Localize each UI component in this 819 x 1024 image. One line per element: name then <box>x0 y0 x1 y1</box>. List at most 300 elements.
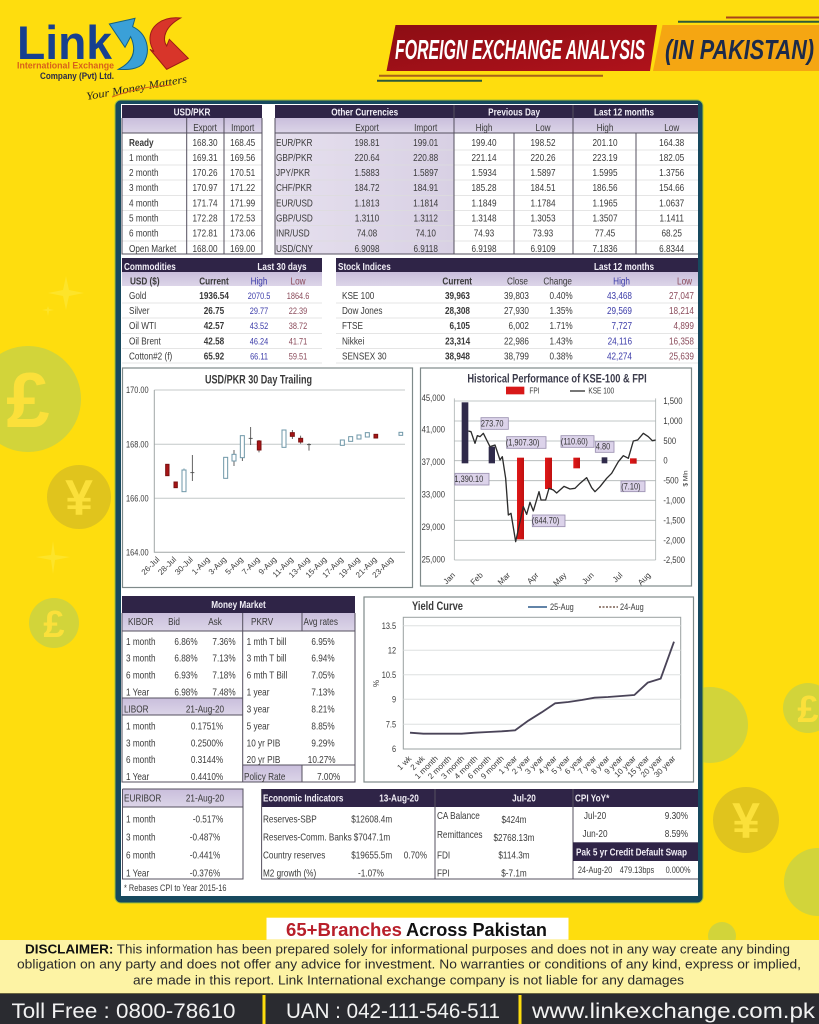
chart: yield curve: 12 <box>388 646 396 656</box>
table: other currencies: 1.1784 <box>530 198 556 209</box>
month axis labels: Feb <box>469 570 485 587</box>
disclaimer: DISCLAIMER: This information has been prepared solely for informational purposes and does not in any way create any binding <box>25 942 790 956</box>
table: USD/PKR: 173.06 <box>230 228 255 239</box>
chart legend <box>528 602 644 612</box>
table: other currencies: 6.9198 <box>471 243 497 254</box>
date axis labels: 19-Aug <box>337 555 362 580</box>
decorative currency coins: £ <box>797 689 819 731</box>
yield lines <box>410 642 674 734</box>
table: commodities: Low <box>291 276 306 287</box>
table: economic indicators: $12608.4m <box>351 814 392 825</box>
date axis labels: 30-Jul <box>173 555 195 577</box>
table: money market: Avg rates <box>304 616 338 627</box>
table: CPI and credit default swap: Jun-20 <box>582 828 608 839</box>
table: stock indices: 18,214 <box>669 305 694 316</box>
table: money market: 7.13% <box>311 687 335 698</box>
table: money market: 6.95% <box>311 636 335 647</box>
table: stock indices: 43,468 <box>607 290 632 301</box>
right axis: -1,000 <box>663 495 685 506</box>
table: USD/PKR: 172.81 <box>192 228 218 239</box>
title banner <box>377 18 819 81</box>
table: other currencies: Previous Day <box>488 107 541 118</box>
table: USD/PKR: 171.22 <box>230 182 255 193</box>
logo blue arrow <box>109 18 147 70</box>
table: USD/PKR: 169.56 <box>230 152 255 163</box>
table: economic indicators: $114.3m <box>498 850 530 861</box>
candlesticks <box>166 427 403 492</box>
date axis labels: 3-Aug <box>207 555 228 577</box>
table: other currencies: 6.9098 <box>354 243 380 254</box>
table: other currencies: 220.64 <box>354 152 380 163</box>
gridlines <box>454 398 656 560</box>
table: EURIBOR: -0.517% <box>193 814 223 825</box>
table: CPI and credit default swap: 9.30% <box>665 810 688 821</box>
date axis labels: 5-Aug <box>223 555 245 577</box>
table: USD/PKR: 169.31 <box>192 152 218 163</box>
table: other currencies: 1.3756 <box>659 167 684 178</box>
month axis labels: Aug <box>636 571 652 587</box>
FPI data callouts <box>455 418 645 527</box>
table: other currencies: 182.05 <box>659 152 684 163</box>
right axis: -2,000 <box>663 535 685 546</box>
decorative currency coins: £ <box>6 356 50 444</box>
table: other currencies: 1.1813 <box>354 198 380 209</box>
tenor axis labels: 6 year <box>563 754 585 776</box>
tenor axis labels: 3 year <box>523 754 546 776</box>
table: USD/PKR: 171.74 <box>192 198 218 209</box>
table: economic indicators: Remittances <box>437 829 483 840</box>
table: EURIBOR: -0.441% <box>190 850 220 861</box>
table: money market: 6 month <box>126 754 156 765</box>
chart: yield curve: 6 <box>392 744 396 754</box>
table: commodities: High <box>251 276 267 287</box>
table: other currencies: 1.1849 <box>471 198 497 209</box>
disclaimer: obligation on any party and does not offer any advice for investment. No warranties or conditions of any kind, express or implied, <box>17 956 801 972</box>
decorative currency coins: £ <box>43 604 65 646</box>
table: money market: 9.29% <box>311 738 335 749</box>
table: economic indicators: $424m <box>501 814 527 825</box>
UAN: UAN : 042-111-546-511 <box>286 1000 500 1023</box>
date axis labels: 28-Jul <box>156 555 178 577</box>
table: economic indicators: $19655.5m <box>351 850 392 861</box>
table: CPI and credit default swap: 479.13bps <box>620 865 654 875</box>
table: commodities: 2070.5 <box>248 291 271 301</box>
month axis labels <box>442 570 652 588</box>
table: other currencies: GBP/PKR <box>276 152 313 163</box>
table: money market: 10 yr PIB <box>247 738 280 749</box>
website: www.linkexchange.com.pk <box>531 1000 816 1023</box>
table: stock indices: 39,963 <box>445 290 470 301</box>
tenor axis labels: 1 month <box>413 754 440 781</box>
chart: USD/PKR candlesticks <box>122 368 412 588</box>
table: other currencies: 220.26 <box>530 152 556 163</box>
decorative currency coins: ¥ <box>65 470 93 526</box>
table: stock indices: 27,930 <box>504 305 529 316</box>
table: economic indicators: $-7.1m <box>501 868 527 879</box>
table: stock indices: 24,116 <box>608 336 632 347</box>
table: stock indices: 28,308 <box>445 305 470 316</box>
table: other currencies: Last 12 months <box>594 107 654 118</box>
right axis: -1,500 <box>663 515 685 526</box>
table: other currencies: 198.52 <box>530 137 556 148</box>
table: USD/PKR: 4 month <box>129 198 159 209</box>
table: stock indices: 7,727 <box>612 320 632 331</box>
table: other currencies: 1.3110 <box>355 213 379 224</box>
decorative currency coins: ¥ <box>732 793 760 849</box>
tenor axis labels: 5 year <box>550 754 572 776</box>
table: money market: 7.13% <box>212 653 236 664</box>
table: CPI and credit default swap: Jul-20 <box>584 810 606 821</box>
disclaimer: are made in this report. Link International exchange company is not liable for any damages <box>133 972 685 988</box>
table: commodities: Current <box>199 276 229 287</box>
table: USD/PKR: 170.26 <box>192 167 218 178</box>
right axis: -2,500 <box>663 554 685 565</box>
table: money market: 0.1751% <box>191 721 223 732</box>
table: other currencies: 201.10 <box>592 137 618 148</box>
chart legend <box>506 386 614 396</box>
chart: USD/PKR candlesticks: 170.00 <box>126 385 149 395</box>
table: stock indices: KSE 100 <box>342 290 374 301</box>
table: stock indices: 29,569 <box>607 305 632 316</box>
table: money market <box>122 596 355 782</box>
table: USD/PKR: 1 month <box>129 152 159 163</box>
table: other currencies: CHF/PKR <box>276 182 312 193</box>
table: CPI and credit default swap: 0.000% <box>666 865 691 875</box>
table: other currencies: High <box>597 122 613 133</box>
branches banner: 65+Branches <box>286 920 402 940</box>
table: money market: 7.36% <box>212 636 236 647</box>
table: money market: 1 year <box>247 687 269 698</box>
table: stock indices: FTSE <box>342 320 363 331</box>
table: economic indicators: $2768.13m <box>494 832 534 843</box>
table: other currencies: 74.08 <box>357 228 377 239</box>
table: commodities: Silver <box>129 305 149 316</box>
table: commodities: Oil Brent <box>129 336 161 347</box>
table: other currencies: 184.91 <box>413 182 438 193</box>
table: CPI and credit default swap: 8.59% <box>665 828 688 839</box>
table: other currencies: Import <box>414 122 438 133</box>
date axis labels: 17-Aug <box>321 555 345 580</box>
table: commodities: 46.24 <box>250 337 269 347</box>
tenor axis labels: 4 month <box>453 754 479 781</box>
table: other currencies: 74.10 <box>415 228 436 239</box>
table: commodities: 59.51 <box>289 352 308 362</box>
table: other currencies: 186.56 <box>592 182 618 193</box>
tenor axis labels: 2 month <box>426 754 453 781</box>
table: EURIBOR: 3 month <box>126 832 156 843</box>
table: USD/PKR: Import <box>231 122 255 133</box>
table: USD/PKR: 2 month <box>129 167 159 178</box>
main report panel <box>115 100 703 903</box>
table: stock indices: 4,899 <box>674 320 694 331</box>
table: other currencies <box>275 105 698 254</box>
table: money market: 3 mth T bill <box>247 653 286 664</box>
chart legend: 25-Aug <box>550 602 574 612</box>
chart title: Historical Performance of KSE-100 & FPI <box>467 372 647 385</box>
table: EURIBOR: 21-Aug-20 <box>186 793 224 804</box>
table: stock indices: Low <box>677 276 692 287</box>
table: stock indices: 27,047 <box>669 290 694 301</box>
table: money market: 7.18% <box>212 670 236 681</box>
table: stock indices: Current <box>442 276 472 287</box>
table: commodities: 29.77 <box>250 306 269 316</box>
table: commodities <box>122 258 322 363</box>
table: commodities: 22.39 <box>289 306 308 316</box>
table: stock indices: SENSEX 30 <box>342 351 387 362</box>
table: money market: Bid <box>168 616 180 627</box>
table: commodities: 26.75 <box>204 305 224 316</box>
table: other currencies: 73.93 <box>533 228 553 239</box>
table: USD/PKR: 170.51 <box>230 167 255 178</box>
table: commodities: Oil WTI <box>129 320 156 331</box>
table: money market: 10.27% <box>308 754 336 765</box>
table: other currencies: 198.81 <box>354 137 380 148</box>
table: other currencies: EUR/PKR <box>276 137 313 148</box>
right axis: 0 <box>663 455 668 466</box>
table: stock indices: Last 12 months <box>594 261 654 272</box>
table: USD/PKR: USD/PKR <box>174 107 211 118</box>
table: USD/PKR: 168.30 <box>192 137 218 148</box>
table: other currencies: 154.66 <box>659 182 684 193</box>
chart legend: KSE 100 <box>588 386 614 396</box>
table: commodities: Last 30 days <box>257 261 307 272</box>
table: money market: PKRV <box>251 616 274 627</box>
table: USD/PKR: 168.00 <box>192 243 218 254</box>
table: other currencies: 199.40 <box>471 137 497 148</box>
tenor axis labels: 8 year <box>589 754 612 776</box>
table: money market: 6.86% <box>174 636 198 647</box>
table: EURIBOR: -0.376% <box>190 868 220 879</box>
chart: USD/PKR candlesticks: 164.00 <box>126 548 149 558</box>
FPI bars <box>462 402 637 539</box>
company type: Company (Pvt) Ltd. <box>40 71 114 82</box>
table: USD/PKR: 172.28 <box>192 213 218 224</box>
table: stock indices: 6,105 <box>450 320 470 331</box>
table: commodities: Gold <box>129 290 146 301</box>
table: commodities: 41.71 <box>289 337 308 347</box>
chart legend: 24-Aug <box>620 602 644 612</box>
table: EURIBOR <box>122 789 243 879</box>
table: stock indices: 6,002 <box>509 320 529 331</box>
company name: International Exchange <box>17 60 114 72</box>
tenor axis labels: 3 month <box>439 754 466 781</box>
logo wordmark: Link <box>17 16 113 69</box>
table: commodities: 66.11 <box>250 352 268 362</box>
table: commodities: USD ($) <box>130 276 160 287</box>
FPI data callouts: (1,907.30) <box>506 438 540 448</box>
table: money market: 6 mth T Bill <box>247 670 287 681</box>
table: stock indices: 1.43% <box>549 336 573 347</box>
date axis labels: 1-Aug <box>190 555 212 577</box>
table: money market: 21-Aug-20 <box>186 704 224 715</box>
left axis: 33,000 <box>422 489 445 500</box>
table: CPI and credit default swap: Pak 5 yr Credit Default Swap <box>576 847 687 858</box>
tagline: Your Money Matters <box>85 73 188 103</box>
table: money market: 5 year <box>247 721 269 732</box>
decorative currency coins <box>0 276 819 950</box>
table: money market: 8.85% <box>311 721 335 732</box>
table: other currencies: 1.3053 <box>530 213 556 224</box>
right axis: -500 <box>663 475 679 486</box>
table: EURIBOR: 1 Year <box>126 868 149 879</box>
table: other currencies: 1.5995 <box>592 167 618 178</box>
chart: yield curve: % <box>372 680 381 687</box>
table: other currencies: 1.1965 <box>592 198 618 209</box>
table: stock indices: High <box>613 276 630 287</box>
table: economic indicators: Reserves-SBP <box>263 814 317 825</box>
table: money market: 6.88% <box>174 653 198 664</box>
table: other currencies: 1.3148 <box>471 213 497 224</box>
table: commodities: 43.52 <box>250 321 269 331</box>
tenor axis labels: 9 month <box>479 754 506 781</box>
table: other currencies: Export <box>355 122 379 133</box>
table: CPI and credit default swap: CPI YoY* <box>575 793 610 804</box>
table: stock indices: Stock Indices <box>338 261 391 272</box>
table: money market: 3 year <box>247 704 269 715</box>
table: USD/PKR: 3 month <box>129 182 159 193</box>
table: other currencies: 1.0637 <box>659 198 684 209</box>
table: stock indices: Nikkei <box>342 336 364 347</box>
branches banner: Across Pakistan <box>406 920 547 940</box>
table: other currencies: Other Currencies <box>331 107 398 118</box>
table: economic indicators: FDI <box>437 850 450 861</box>
table: other currencies: 184.72 <box>354 182 380 193</box>
table: stock indices: 1.71% <box>549 320 573 331</box>
table: stock indices: 23,314 <box>445 336 471 347</box>
left axis: 37,000 <box>422 456 445 467</box>
table: stock indices: 25,639 <box>669 351 694 362</box>
table: economic indicators: -1.07% <box>358 868 384 879</box>
table: economic indicators: FPI <box>437 868 450 879</box>
table: money market: KIBOR <box>128 616 154 627</box>
contact footer <box>0 993 819 1024</box>
month axis labels: Jun <box>580 571 596 586</box>
table: money market: Policy Rate <box>244 771 285 782</box>
table: money market: 6 month <box>126 670 156 681</box>
table: money market: 1 Year <box>126 771 149 782</box>
table: other currencies: 68.25 <box>661 228 682 239</box>
table: EURIBOR: EURIBOR <box>124 793 162 804</box>
table: EURIBOR: -0.487% <box>190 832 220 843</box>
table: commodities: 42.58 <box>204 336 224 347</box>
table: money market: 1 Year <box>126 687 149 698</box>
tenor axis labels: 4 year <box>537 754 559 776</box>
FPI data callouts: (644.70) <box>532 516 560 526</box>
table: USD/PKR: Open Market <box>129 243 177 254</box>
disclaimer <box>0 940 819 993</box>
table: stock indices: 0.38% <box>549 351 573 362</box>
table: USD/PKR <box>122 105 262 254</box>
table: other currencies: USD/CNY <box>276 243 313 254</box>
chart: yield curve <box>364 597 694 782</box>
table: USD/PKR: Ready <box>129 137 154 148</box>
table: commodities: Cotton#2 (f) <box>129 351 172 362</box>
table: commodities: Commodities <box>124 261 176 272</box>
chart title: USD/PKR 30 Day Trailing <box>205 372 312 386</box>
table: other currencies: 77.45 <box>595 228 615 239</box>
FPI data callouts: (110.60) <box>561 437 588 447</box>
table: money market: 3 month <box>126 653 156 664</box>
table: other currencies: 7.1836 <box>592 243 618 254</box>
table: other currencies: 1.3507 <box>592 213 618 224</box>
table: money market: 3 month <box>126 738 156 749</box>
table: economic indicators: Economic Indicators <box>263 793 343 804</box>
table: stock indices: 42,274 <box>607 351 632 362</box>
table: stock indices <box>336 258 698 363</box>
chart: yield curve: 10.5 <box>382 670 396 680</box>
tenor axis labels: 7 year <box>576 754 598 776</box>
table: stock indices: 16,358 <box>669 336 694 347</box>
table: money market: 6.98% <box>174 687 198 698</box>
table: other currencies: High <box>476 122 492 133</box>
left axis: 25,000 <box>422 554 445 565</box>
table: money market: 1 month <box>126 721 156 732</box>
table: money market: 1 mth T bill <box>247 636 286 647</box>
table: money market: 7.05% <box>311 670 335 681</box>
FPI data callouts: 273.70 <box>481 419 504 429</box>
tenor axis labels: 2 year <box>510 754 532 776</box>
table: other currencies: 1.1411 <box>659 213 684 224</box>
table: other currencies: Low <box>664 122 680 133</box>
table: economic indicators: 0.70% <box>404 850 427 861</box>
month axis labels: Jul <box>611 571 625 584</box>
footnote: * Rebases CPI to Year 2015-16 <box>124 883 227 893</box>
table: other currencies: 199.01 <box>413 137 438 148</box>
KSE-100 line <box>468 431 656 542</box>
table: money market: 1 month <box>126 636 156 647</box>
table: stock indices: 38,799 <box>504 351 529 362</box>
tenor axis labels <box>395 753 678 781</box>
date axis labels: 23-Aug <box>371 555 395 580</box>
table: USD/PKR: 170.97 <box>192 182 218 193</box>
right axis: 1,500 <box>663 395 683 406</box>
table: USD/PKR: 168.45 <box>230 137 255 148</box>
table: commodities: 38.72 <box>289 321 308 331</box>
tenor axis labels: 10 year <box>613 754 638 779</box>
left axis: 41,000 <box>422 424 445 435</box>
table: economic indicators: M2 growth (%) <box>263 868 316 879</box>
table: other currencies: 1.3112 <box>413 213 438 224</box>
table: stock indices: 38,948 <box>445 351 470 362</box>
table: CPI and credit default swap <box>573 793 698 875</box>
toll free: Toll Free : 0800-78610 <box>12 1000 236 1023</box>
logo <box>17 16 188 103</box>
table: other currencies: 185.28 <box>471 182 497 193</box>
table: economic indicators: Country reserves <box>263 850 326 861</box>
table: CPI and credit default swap: 24-Aug-20 <box>578 865 613 875</box>
date axis labels: 11-Aug <box>271 555 295 579</box>
table: USD/PKR: 171.99 <box>230 198 255 209</box>
chart: yield curve: 13.5 <box>382 621 396 631</box>
logo red arrow <box>150 18 188 69</box>
table: other currencies: 220.88 <box>413 152 438 163</box>
table: other currencies: 221.14 <box>471 152 497 163</box>
FPI data callouts: (7.10) <box>621 482 641 492</box>
table: USD/PKR: 5 month <box>129 213 159 224</box>
left axis <box>422 392 445 565</box>
title orange band <box>653 25 819 71</box>
tenor axis labels: 1 year <box>497 754 519 776</box>
table: money market: LIBOR <box>124 704 149 715</box>
right axis: 1,000 <box>663 415 683 426</box>
table: money market: 6.93% <box>174 670 198 681</box>
table: stock indices: 22,986 <box>504 336 529 347</box>
chart: KSE-100 and FPI <box>420 368 692 588</box>
table: money market: 8.21% <box>311 704 335 715</box>
table: money market: Ask <box>208 616 222 627</box>
FPI data callouts: 1,390.10 <box>455 474 484 484</box>
table: stock indices: Change <box>543 276 572 287</box>
